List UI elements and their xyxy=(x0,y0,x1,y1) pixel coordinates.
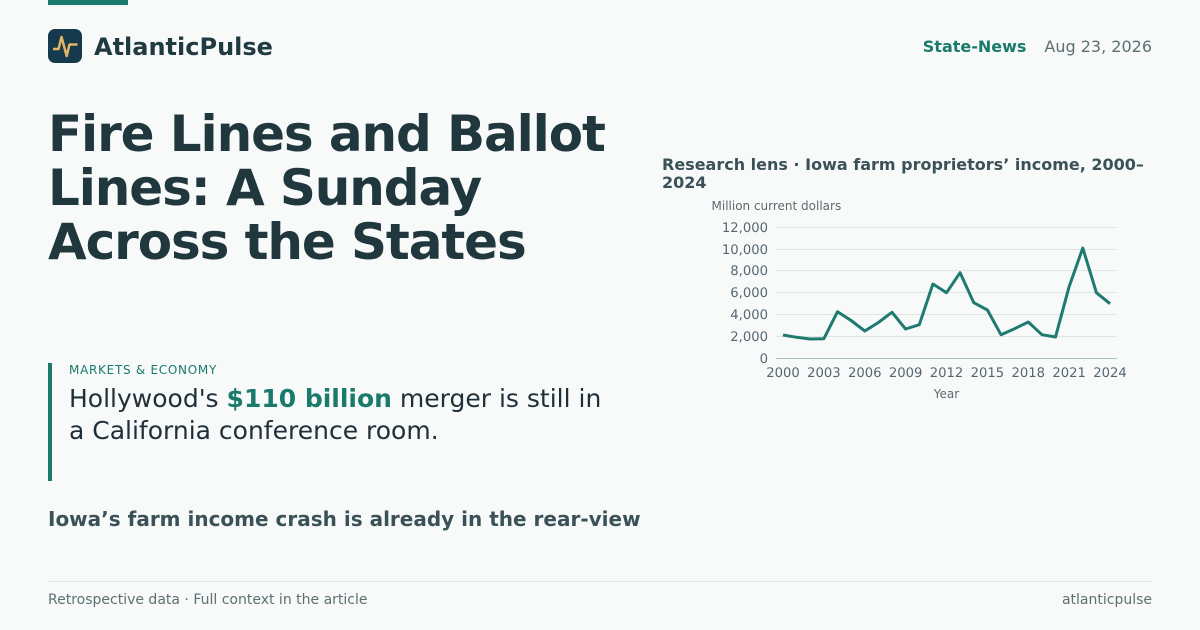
title: Across the States xyxy=(48,213,526,271)
y axis labels: 0 xyxy=(760,352,768,367)
title: Lines: A Sunday xyxy=(48,159,481,217)
y axis labels: 2,000 xyxy=(730,330,768,345)
line chart xyxy=(712,199,1127,401)
icon: pulse logo xyxy=(48,29,82,63)
y axis labels: 12,000 xyxy=(722,221,768,236)
x axis labels xyxy=(766,366,1127,381)
accent bar xyxy=(48,0,128,5)
x axis labels: 2021 xyxy=(1052,366,1086,381)
callout xyxy=(48,363,612,481)
x axis labels: 2003 xyxy=(807,366,841,381)
y axis labels xyxy=(722,221,768,367)
income line xyxy=(783,248,1110,339)
x axis labels: 2006 xyxy=(848,366,882,381)
brand header xyxy=(48,29,273,63)
subheading: Iowa’s farm income crash is already in the rear-view xyxy=(48,507,641,531)
header meta: State-News Aug 23, 2026 xyxy=(923,37,1152,56)
callout text xyxy=(69,384,601,445)
chart heading: Research lens · Iowa farm proprietors’ income, 2000– xyxy=(662,155,1144,174)
title xyxy=(48,105,605,271)
chart heading: 2024 xyxy=(662,173,707,192)
footer xyxy=(48,581,1152,618)
chart heading xyxy=(662,155,1144,192)
title: Fire Lines and Ballot xyxy=(48,105,605,163)
x axis labels: 2018 xyxy=(1012,366,1045,381)
y axis labels: 6,000 xyxy=(730,286,768,301)
brand name: AtlanticPulse xyxy=(94,33,273,61)
y axis labels: 10,000 xyxy=(722,243,768,258)
y axis labels: 4,000 xyxy=(730,308,768,323)
footer note: Retrospective data · Full context in the article xyxy=(48,592,367,608)
callout text: Hollywood's $110 billion merger is still in xyxy=(69,384,601,413)
y axis title: Million current dollars xyxy=(712,199,841,213)
footer brand: atlanticpulse xyxy=(1062,592,1152,608)
y axis labels: 8,000 xyxy=(730,264,768,279)
x axis labels: 2000 xyxy=(766,366,800,381)
x axis labels: 2009 xyxy=(889,366,922,381)
x axis labels: 2012 xyxy=(930,366,963,381)
callout text: a California conference room. xyxy=(69,416,439,445)
x axis labels: 2015 xyxy=(971,366,1004,381)
x axis title: Year xyxy=(933,387,959,401)
x axis labels: 2024 xyxy=(1093,366,1127,381)
callout label: MARKETS & ECONOMY xyxy=(69,363,217,377)
